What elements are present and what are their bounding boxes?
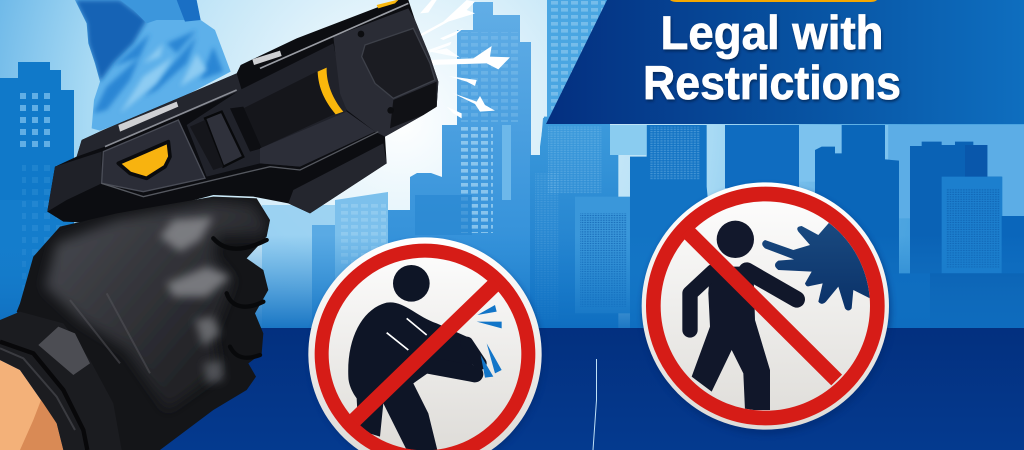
- recessed side window: [243, 72, 340, 148]
- headline banner: Restrictions: [643, 56, 901, 109]
- taser device: [47, 0, 438, 223]
- pushing figure: [348, 265, 502, 450]
- taser rear cap: [47, 152, 102, 212]
- red slash: [687, 231, 837, 380]
- taser darts and sparks: [403, 0, 510, 118]
- gloved hand: [0, 197, 270, 450]
- yellow badge: [670, 0, 877, 2]
- grip ridges: [205, 112, 243, 167]
- walking figure: [717, 221, 754, 258]
- glove highlights: [160, 217, 213, 252]
- yellow arc: [318, 68, 343, 114]
- red ring: [315, 244, 535, 450]
- headline text: Legal with: [660, 6, 884, 59]
- prohibition sign: spraying person: [642, 182, 892, 435]
- glove cuff: [0, 312, 122, 450]
- silver top strips: [118, 51, 282, 132]
- taser mid body: [187, 43, 375, 177]
- headline banner: [546, 0, 1024, 124]
- ground band: [0, 328, 1024, 450]
- taser rear panel: [102, 120, 205, 192]
- lower grip block: [288, 143, 387, 213]
- statue of liberty: [75, 0, 231, 131]
- sign disc: [642, 182, 889, 430]
- lower body panel: [260, 112, 375, 167]
- spray splat: [690, 221, 887, 410]
- prohibition sign: pushing person: [308, 237, 543, 450]
- finger creases: [213, 238, 267, 358]
- muzzle head: [333, 8, 438, 137]
- yellow grip badge: [118, 142, 170, 178]
- sky background: [0, 0, 1024, 330]
- sign disc: [308, 237, 542, 450]
- glove lit area: [45, 202, 267, 410]
- haze over skyline base: [0, 235, 1024, 329]
- taser top shell: [77, 73, 242, 157]
- red slash: [354, 283, 497, 421]
- muzzle face: [362, 28, 435, 98]
- road line: [593, 359, 596, 450]
- yellow top tip: [377, 0, 398, 8]
- city skyline: left and centre: [0, 0, 607, 330]
- city skyline: right: [530, 117, 1024, 328]
- red ring: [653, 194, 877, 418]
- forearm skin: [0, 360, 63, 450]
